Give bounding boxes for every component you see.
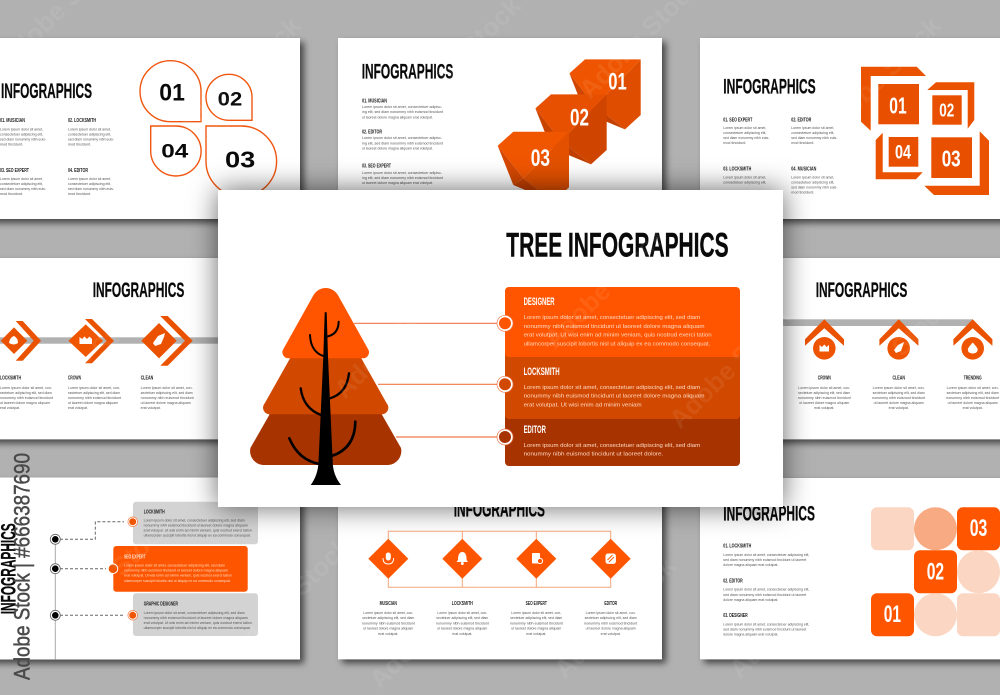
chevron diamond: crown	[68, 319, 114, 363]
text block: four roles: consectetuer adipiscing elit,	[723, 180, 766, 184]
text block: timeline captions: sectetuer adipiscing elit, sed diam	[68, 391, 120, 395]
text block: four roles: mod tincidunt.	[791, 141, 814, 145]
watermark: stock pattern: Adobe Stock	[223, 530, 357, 664]
card: locksmith: LOCKSMITH	[144, 509, 165, 515]
text block: roof captions: ut laoreet dolore magna aliquam	[874, 401, 924, 405]
text block: diamond captions: ut laoreet dolore magna aliquam	[586, 626, 636, 630]
polygon 02: 02	[570, 105, 589, 132]
text block: four roles: 02. EDITOR	[791, 117, 811, 123]
text block: four roles: Lorem ipsum dolor sit amet,	[68, 128, 111, 132]
card: locksmith: ullamcorper suscipit lobortis nisl ut aliquip ex ea commodo consequat.	[144, 534, 251, 538]
text block: four roles: mod tincidunt.	[68, 192, 91, 196]
text block: four roles: 02. LOCKSMITH	[68, 118, 96, 124]
panel: tile grid	[700, 478, 1000, 659]
heading: infographics: INFOGRAPHICS	[723, 76, 816, 99]
text block: timeline captions: LOCKSMITH	[0, 375, 21, 381]
text block: three roles: Lorem ipsum dolor sit amet, consectetuer adipisc-	[362, 105, 442, 109]
text block: roof captions: sectetuer adipiscing elit, sed diam	[798, 391, 850, 395]
watermark: stock pattern: Adobe Stock	[813, 10, 947, 144]
text block: four roles: consectetuer adipiscing elit,	[68, 132, 111, 136]
card: seo expert	[108, 546, 248, 592]
card: locksmith: erat volutpat. Ut wisi enim ad minim veniam	[524, 402, 642, 408]
panel: chevron timeline	[0, 258, 230, 439]
text block: four roles: 01. MUSICIAN	[0, 118, 25, 124]
card: graphic designer: Lorem ipsum dolor sit amet, consectetuer adipiscing elit, sed diam	[144, 611, 245, 615]
panel: diamond row	[338, 470, 662, 659]
text block: diamond captions: erat volutpat.	[526, 632, 546, 636]
watermark: stock id vertical text: Adobe Stock | #666387690	[10, 453, 34, 680]
card: editor: EDITOR	[524, 424, 546, 436]
text block: roof captions: nonummy nibh euismod tincidunt	[872, 396, 925, 400]
text block: timeline captions: sectetuer adipiscing elit, sed diam	[141, 391, 193, 395]
text block: roof captions: erat volutpat.	[889, 406, 909, 410]
text block: diamond captions	[362, 601, 637, 636]
text block: three roles: Lorem ipsum dolor sit amet, consectetuer adipisc-	[362, 136, 442, 140]
heading: infographics: INFOGRAPHICS	[362, 60, 453, 83]
tile grid: 01	[884, 601, 901, 628]
panel: stacked polygons	[338, 38, 662, 220]
roof icon: trending	[953, 319, 992, 360]
text block: three roles: ut laoreet dolore magna aliquam erat volutpat.	[362, 116, 433, 120]
card: locksmith	[128, 502, 258, 544]
text block: three roles: Lorem ipsum dolor sit amet, consectetuer adipiscing elit,	[723, 622, 809, 626]
card: graphic designer: nonummy nibh euismod tincidunt ut laoreet dolore magna aliquam	[144, 616, 248, 620]
text block: timeline captions: erat volutpat.	[0, 406, 20, 410]
card: designer: DESIGNER	[524, 296, 555, 308]
text block: timeline captions: erat volutpat.	[141, 406, 161, 410]
panel: four drop shapes	[0, 38, 300, 219]
text block: timeline captions	[0, 375, 194, 410]
text block: three roles	[362, 98, 443, 185]
text block: diamond captions: erat volutpat.	[601, 632, 621, 636]
text block: diamond captions: nonummy nibh euismod tincidunt	[584, 622, 637, 626]
text block: four roles: sed diam nonummy nibh euis-	[791, 185, 837, 189]
text block: diamond captions: sectetuer adipiscing elit, sed diam	[510, 616, 562, 620]
tile grid: 03	[970, 515, 987, 542]
text block: roof captions	[798, 375, 999, 410]
panel: four framed squares	[700, 38, 1000, 219]
text block: four roles: 03. LOCKSMITH	[723, 167, 751, 173]
text block: four roles: Lorem ipsum dolor sit amet,	[0, 177, 43, 181]
framed square 04	[876, 133, 923, 179]
tile grid: 02	[927, 558, 944, 585]
drop 02	[206, 74, 252, 120]
text block: timeline captions: nonummy nibh euismod tincidunt	[0, 396, 53, 400]
text block: four roles: consectetuer adipiscing elit,	[68, 182, 111, 186]
roof icon: crown	[805, 319, 844, 360]
text block: timeline captions: Lorem ipsum dolor sit amet, con-	[68, 386, 120, 390]
text block: four roles: consectetuer adipiscing elit,	[791, 131, 834, 135]
text block: timeline captions: nonummy nibh euismod tincidunt	[141, 396, 194, 400]
text block: roof captions: sectetuer adipiscing elit, sed diam	[947, 391, 999, 395]
text block: four roles: mod tincidunt.	[791, 190, 814, 194]
watermark: stock pattern: Adobe Stock	[663, 300, 797, 434]
text block: roof captions: Lorem ipsum dolor sit amet, con-	[798, 386, 850, 390]
drop 01: 01	[159, 80, 185, 107]
text block: four roles: consectetuer adipiscing elit,	[723, 131, 766, 135]
text block: four roles: sed diam nonummy nibh euis-	[68, 187, 114, 191]
heading: infographics: INFOGRAPHICS	[454, 499, 545, 522]
text block: diamond captions: SEO EXPERT	[526, 601, 547, 607]
text block: roof captions: CROWN	[818, 375, 831, 381]
tile grid	[871, 507, 1000, 636]
framed square 01: 01	[889, 92, 907, 118]
card: graphic designer: erat volutpat. Ut wisi enim ad minim veniam, quis nostrud exerci tation	[144, 621, 252, 625]
connector: graphic designer	[50, 610, 124, 620]
text block: three roles: 03. SEO EXPERT	[362, 164, 391, 170]
text block: diamond captions: sectetuer adipiscing elit, sed diam	[436, 616, 488, 620]
node markers	[497, 315, 513, 445]
chevron diamond: locksmith	[1, 321, 41, 361]
heading: infographics: INFOGRAPHICS	[816, 279, 907, 302]
text block: four roles: 03. SEO EXPERT	[0, 168, 29, 174]
drop 04	[151, 126, 201, 176]
panel: vertical branching list	[0, 478, 300, 660]
card: designer: nonummy nibh euismod tincidunt ut laoreet dolore magna aliquam	[524, 324, 705, 330]
card: locksmith: erat volutpat. Ut wisi enim ad minim veniam, quis nostrud exerci tation	[144, 528, 252, 532]
text block: three roles: 01. LOCKSMITH	[723, 544, 751, 550]
card: editor: Lorem ipsum dolor sit amet, consectetuer adipiscing elit, sed diam	[524, 443, 701, 449]
text block: three roles: sed diam nonummy nibh euismod tincidunt ut laoreet	[723, 558, 806, 562]
watermark: stock pattern: Adobe Stock	[363, 560, 497, 694]
diamond icon: editor	[591, 539, 631, 579]
text block: four roles: Lorem ipsum dolor sit amet,	[791, 175, 834, 179]
watermark: stock pattern: Adobe Stock	[208, 210, 342, 344]
text block: three roles: 02. EDITOR	[723, 578, 743, 584]
text block: roof captions: erat volutpat.	[963, 406, 983, 410]
text block: timeline captions: erat volutpat.	[68, 406, 88, 410]
card: graphic designer	[128, 593, 258, 636]
text block: timeline captions: Lorem ipsum dolor sit amet, con-	[0, 386, 52, 390]
text block: three roles: 01. MUSICIAN	[362, 98, 387, 104]
text block: three roles: Lorem ipsum dolor sit amet, consectetuer adipiscing elit,	[723, 588, 809, 592]
text block: three roles: ing elit, sed diam nonummy nibh euismod tincidunt	[362, 176, 443, 180]
text block: four roles: mod tincidunt.	[68, 142, 91, 146]
heading: infographics: INFOGRAPHICS	[93, 279, 184, 302]
roof icon: clean	[879, 319, 918, 360]
text block: four roles: mod tincidunt.	[0, 142, 23, 146]
card: seo expert: nonummy nibh euismod tincidunt ut laoreet dolore magna aliquam	[124, 568, 228, 572]
framed square 04: 04	[895, 142, 911, 163]
text block: diamond captions: LOCKSMITH	[452, 601, 473, 607]
framed square 01	[861, 67, 926, 131]
drop 03: 03	[225, 146, 255, 172]
framed square 02: 02	[939, 101, 954, 121]
card: editor	[505, 405, 740, 466]
card: locksmith: LOCKSMITH	[524, 366, 560, 378]
text block: three roles: sed diam nonummy nibh euismod tincidunt ut laoreet	[723, 628, 806, 632]
card: locksmith: Lorem ipsum dolor sit amet, consectetuer adipiscing elit, sed diam	[524, 385, 701, 391]
text block: four roles: Lorem ipsum dolor sit amet,	[68, 177, 111, 181]
text block: four roles: consectetuer adipiscing elit,	[791, 180, 834, 184]
text block: timeline captions: Lorem ipsum dolor sit amet, con-	[141, 386, 193, 390]
watermark: stock pattern: Adobe Stock	[43, 510, 177, 644]
watermark: stock pattern: Adobe Stock	[548, 550, 682, 684]
text block: four roles: sed diam nonummy nibh euis-	[68, 138, 114, 142]
text block: three roles: dolore magna aliquam erat volutpat.	[723, 598, 778, 602]
text block: roof captions: CLEAN	[892, 375, 905, 381]
text block: three roles: dolore magna aliquam erat volutpat.	[723, 632, 778, 636]
card: designer	[505, 287, 740, 357]
text block: diamond captions: EDITOR	[604, 601, 617, 607]
heading: infographics: INFOGRAPHICS	[1, 80, 92, 103]
watermark: stock pattern: Adobe Stock	[823, 290, 957, 424]
text block: roof captions: Lorem ipsum dolor sit amet, con-	[947, 386, 999, 390]
text block: diamond captions: Lorem ipsum dolor sit amet, con-	[511, 611, 561, 615]
tree illustration	[250, 288, 401, 485]
framed square 03	[924, 131, 989, 195]
card: designer: ullamcorper suscipit lobortis nisl ut aliquip ex ea commodo consequat.	[524, 342, 711, 348]
connector lines	[354, 323, 498, 437]
text block: four roles: consectetuer adipiscing elit,	[0, 182, 43, 186]
text block: timeline captions: ut laoreet dolore magna aliquam	[141, 401, 191, 405]
text block: four roles: sed diam nonummy nibh euis-	[791, 136, 837, 140]
text block: diamond captions: ut laoreet dolore magna aliquam	[437, 626, 487, 630]
title: TREE INFOGRAPHICS	[506, 227, 729, 265]
text block: diamond captions: Lorem ipsum dolor sit amet, con-	[437, 611, 487, 615]
text block: diamond captions: erat volutpat.	[378, 632, 398, 636]
text block: four roles	[723, 117, 837, 194]
text block: four roles: sed diam nonummy nibh euis-	[723, 136, 769, 140]
framed square 02	[927, 82, 974, 129]
text block: diamond captions: erat volutpat.	[452, 632, 472, 636]
card: locksmith: Lorem ipsum dolor sit amet, consectetuer adipiscing elit, sed diam	[144, 518, 245, 522]
card: designer: Lorem ipsum dolor sit amet, consectetuer adipiscing elit, sed diam	[524, 315, 701, 321]
text block: roof captions: nonummy nibh euismod tincidunt	[946, 396, 999, 400]
text block: roof captions: nonummy nibh euismod tincidunt	[798, 396, 851, 400]
watermark: stock pattern: Adobe Stock	[173, 10, 307, 144]
card: designer: erat volutpat. Ut wisi enim ad minim veniam, quis nostrud exerci tation	[524, 332, 712, 338]
drop 01	[140, 61, 201, 122]
text block: four roles: 04. MUSICIAN	[791, 167, 816, 173]
polygon 01	[569, 59, 641, 129]
polygon 02	[535, 94, 607, 164]
card: seo expert: SEO EXPERT	[124, 554, 146, 560]
card: editor: nonummy nibh euismod tincidunt ut laoreet dolore.	[524, 452, 664, 458]
drop 04: 04	[161, 140, 188, 162]
text block: diamond captions: nonummy nibh euismod tincidunt	[436, 622, 489, 626]
drop 03	[206, 126, 277, 197]
text block: four roles	[0, 118, 114, 196]
text block: three roles	[723, 544, 809, 636]
diamond icon: seo expert	[516, 539, 556, 579]
text block: four roles: mod tincidunt.	[0, 192, 23, 196]
text block: three roles: ut laoreet dolore magna aliquam erat volutpat.	[362, 181, 433, 185]
card: seo expert: Lorem ipsum dolor sit amet, consectetuer adipiscing elit, sed diam	[124, 564, 225, 568]
text block: timeline captions: ut laoreet dolore magna aliquam	[68, 401, 118, 405]
text block: diamond captions: sectetuer adipiscing elit, sed diam	[362, 616, 414, 620]
text block: diamond captions: nonummy nibh euismod tincidunt	[510, 622, 563, 626]
text block: roof captions: erat volutpat.	[814, 406, 834, 410]
text block: diamond captions: ut laoreet dolore magna aliquam	[511, 626, 561, 630]
text block: diamond captions: MUSICIAN	[380, 601, 397, 607]
text block: three roles: 02. EDITOR	[362, 129, 382, 135]
text block: diamond captions: Lorem ipsum dolor sit amet, con-	[586, 611, 636, 615]
text block: timeline captions: sectetuer adipiscing elit, sed diam	[0, 391, 52, 395]
watermark: stock pattern: Adobe Stock	[538, 220, 672, 354]
text block: roof captions: ut laoreet dolore magna aliquam	[799, 401, 849, 405]
text block: three roles: dolore magna aliquam erat volutpat.	[723, 563, 778, 567]
diamond icon: locksmith	[442, 539, 482, 579]
watermark: stock pattern: Adobe Stock	[723, 550, 857, 684]
text block: diamond captions: sectetuer adipiscing elit, sed diam	[585, 616, 637, 620]
text block: three roles: ut laoreet dolore magna aliquam erat volutpat.	[362, 146, 433, 150]
text block: three roles: Lorem ipsum dolor sit amet, consectetuer adipisc-	[362, 171, 442, 175]
heading: infographics: INFOGRAPHICS	[723, 503, 815, 526]
text block: timeline captions: nonummy nibh euismod tincidunt	[68, 396, 121, 400]
panel: roof timeline	[770, 258, 1000, 439]
watermark: stock pattern: Adobe Stock	[23, 290, 157, 424]
diamond icon: musician	[368, 539, 408, 579]
text block: three roles: sed diam nonummy nibh euismod tincidunt ut laoreet	[723, 593, 806, 597]
text block: four roles: 04. EDITOR	[68, 168, 88, 174]
text block: four roles: Lorem ipsum dolor sit amet,	[723, 175, 766, 179]
card: seo expert: ullamcorper suscipit lobortis nisl ut aliquip ex ea commodo consequat.	[124, 579, 231, 583]
text block: diamond captions: nonummy nibh euismod tincidunt	[362, 622, 415, 626]
polygon 03: 03	[531, 145, 550, 172]
text block: four roles: Lorem ipsum dolor sit amet,	[0, 128, 43, 132]
text block: four roles: Lorem ipsum dolor sit amet,	[791, 126, 834, 130]
drop 02: 02	[218, 90, 242, 111]
chevron diamond: clean	[141, 316, 193, 366]
text block: roof captions: Lorem ipsum dolor sit amet, con-	[873, 386, 925, 390]
text block: four roles: sed diam nonummy nibh euis-	[0, 187, 46, 191]
text block: four roles: consectetuer adipiscing elit,	[0, 132, 43, 136]
watermark: stock pattern: Adobe Stock	[328, 270, 462, 404]
card: graphic designer: ullamcorper suscipit lobortis nisl ut aliquip ex ea commodo consequat.	[144, 626, 251, 630]
framed square 03: 03	[942, 146, 961, 172]
text block: roof captions: ut laoreet dolore magna aliquam	[948, 401, 998, 405]
text block: four roles: sed diam nonummy nibh euis-	[0, 138, 46, 142]
text block: four roles: Lorem ipsum dolor sit amet,	[723, 126, 766, 130]
card: locksmith: nonummy nibh euismod tincidunt ut laoreet dolore magna aliquam	[144, 524, 248, 528]
card: graphic designer: GRAPHIC DESIGNER	[144, 601, 178, 607]
polygon 01: 01	[608, 68, 627, 95]
card: locksmith	[505, 350, 740, 419]
text block: timeline captions: CLEAN	[141, 375, 153, 381]
connector: seo expert	[50, 564, 106, 574]
text block: four roles: mod tincidunt.	[723, 141, 746, 145]
text block: roof captions: TRENDING	[964, 375, 982, 381]
text block: roof captions: sectetuer adipiscing elit, sed diam	[873, 391, 925, 395]
text block: diamond captions: Lorem ipsum dolor sit amet, con-	[363, 611, 413, 615]
text block: timeline captions: ut laoreet dolore magna aliquam	[0, 401, 50, 405]
text block: four roles: 01. SEO EXPERT	[723, 117, 753, 123]
connector: locksmith	[50, 522, 124, 544]
text block: three roles: 03. DESIGNER	[723, 613, 748, 619]
polygon 03	[498, 132, 569, 202]
panel: tree infographics main slide	[218, 190, 783, 507]
text block: timeline captions: CROWN	[68, 375, 81, 381]
text block: three roles: ing elit, sed diam nonummy nibh euismod tincidunt	[362, 142, 443, 146]
card: locksmith: nonummy nibh euismod tincidunt ut laoreet dolore magna aliquam	[524, 394, 705, 400]
text block: three roles: ing elit, sed diam nonummy nibh euismod tincidunt	[362, 110, 443, 114]
text block: diamond captions: ut laoreet dolore magna aliquam	[363, 626, 413, 630]
card: seo expert: erat volutpat. Ut wisi enim ad minim veniam, quis nostrud exerci tation	[124, 574, 232, 578]
text block: three roles: Lorem ipsum dolor sit amet, consectetuer adipiscing elit,	[723, 553, 809, 557]
